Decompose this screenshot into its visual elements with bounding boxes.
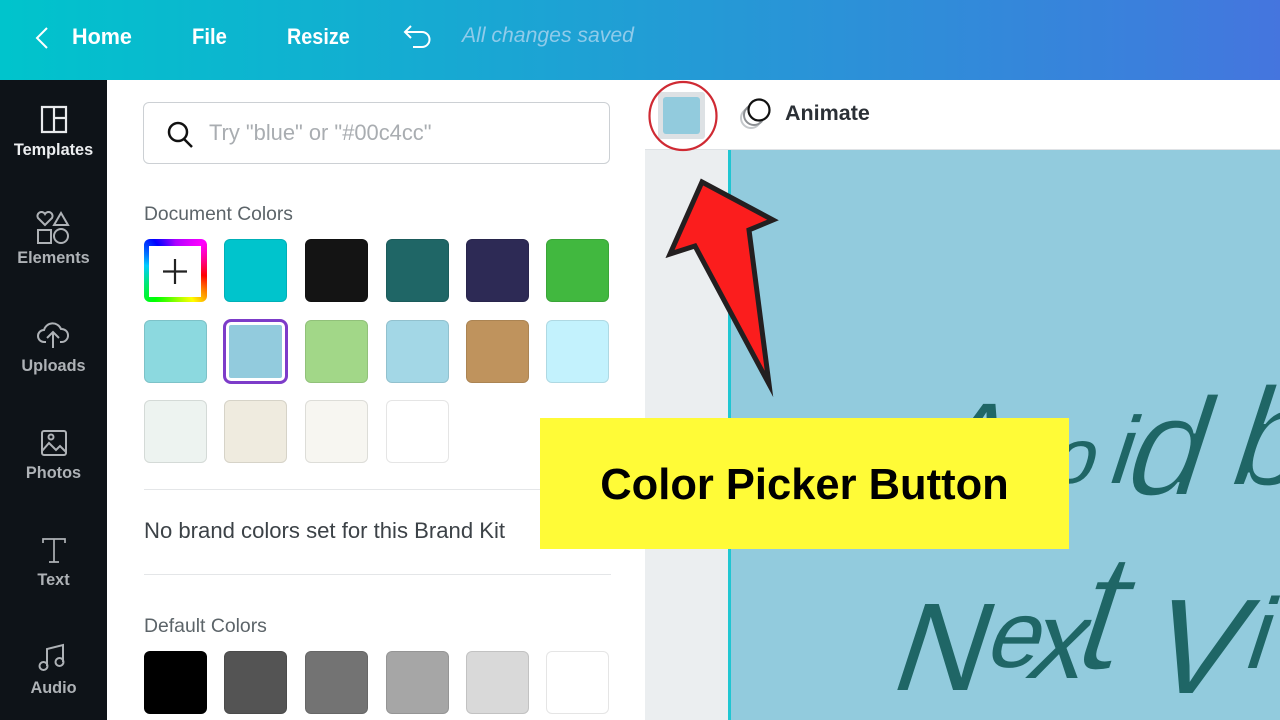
callout: color picker button	[540, 418, 1069, 549]
sidebar: Audio	[30, 679, 77, 697]
top bar: All changes saved	[462, 24, 634, 47]
canvas script text: d	[1108, 369, 1237, 525]
canvas script text: N	[878, 578, 1014, 717]
canvas script text	[878, 359, 1280, 720]
top bar: File	[192, 24, 227, 49]
color picker button	[663, 97, 700, 134]
canvas script text: e	[976, 581, 1063, 687]
icon: uploads	[37, 322, 69, 348]
color panel	[107, 80, 645, 720]
canvas script text: V	[1132, 572, 1270, 720]
red circle annotation	[648, 80, 718, 152]
callout: color picker button: Color Picker Button	[600, 461, 1009, 509]
canvas script text: i	[1098, 397, 1154, 503]
sidebar: Uploads	[21, 357, 86, 375]
sidebar: Text	[37, 571, 70, 589]
toolbar	[645, 80, 1280, 150]
swatch: add color	[144, 239, 207, 302]
top bar	[0, 0, 1280, 80]
swatch: selected color	[223, 319, 288, 384]
icon: elements	[36, 211, 70, 244]
top bar: Resize	[287, 24, 350, 49]
sidebar: Photos	[26, 464, 81, 482]
toolbar: Animate	[785, 101, 870, 125]
canvas script text: t	[1053, 516, 1162, 706]
canvas script text: x	[1016, 579, 1111, 701]
red arrow	[666, 178, 779, 397]
icon: animate	[740, 98, 771, 129]
sidebar: Elements	[17, 249, 90, 267]
canvas script text: o	[1042, 413, 1113, 500]
canvas script text: A	[917, 380, 1036, 508]
sidebar	[0, 80, 107, 720]
search box: Try "blue" or "#00c4cc"	[209, 120, 432, 145]
heading: document colors: Document Colors	[144, 204, 293, 225]
canvas area	[645, 150, 1280, 720]
icon: photos	[41, 430, 67, 456]
top bar: Home	[72, 24, 132, 49]
search box	[143, 102, 610, 164]
icon: templates	[40, 106, 68, 134]
icon: text	[42, 538, 66, 563]
sidebar: Templates	[14, 141, 93, 159]
heading: default colors: Default Colors	[144, 615, 267, 637]
text: brand colors: No brand colors set for this Brand Kit	[144, 518, 505, 543]
icon: audio	[38, 644, 64, 671]
